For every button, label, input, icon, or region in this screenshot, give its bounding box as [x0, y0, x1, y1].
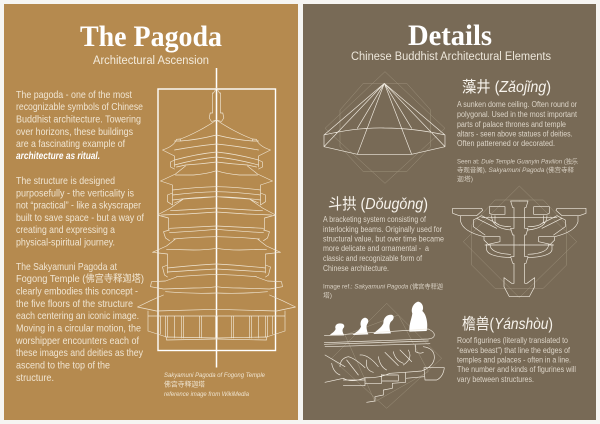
text block: pagoda introduction: architecture as ritual. [16, 151, 100, 162]
text block: Sakyamuni Pagoda [15, 262, 144, 384]
text block: purposeful design: physical-spiritual journey. [16, 238, 115, 248]
title: Details: Details [408, 19, 492, 52]
icon: roof figurines [329, 302, 427, 336]
text block: Dougong description [323, 215, 445, 273]
text block: Dougong description: structural value, but over time became [323, 234, 445, 244]
text block: pagoda introduction: recognizable symbols of Chinese [16, 102, 143, 113]
text block: Dougong description: A bracketing system consisting of [323, 215, 427, 224]
text block: Sakyamuni Pagoda: these images and deities as they [16, 348, 144, 359]
caption: pagoda image reference: 佛宫寺释迦塔 [164, 380, 205, 388]
note: Zaojing locations: 迦塔) [457, 174, 473, 183]
text block: Sakyamuni Pagoda: Moving in a circular motion, the [16, 324, 141, 334]
caption: pagoda image reference: reference image from WikiMedia [164, 391, 249, 398]
text block: Yanshou description: “eaves beast”) that line the edges of [457, 346, 571, 355]
text block: Zaojing description: polygonal. Used in the most important [457, 110, 578, 119]
text block: Sakyamuni Pagoda: ascend to the top of the [16, 360, 110, 372]
text block: Sakyamuni Pagoda: the five floors of the structure [16, 299, 133, 310]
note: Dougong image reference: Image ref.: Sakyamuni Pagoda (佛宫寺释迦 [323, 282, 444, 290]
note: Zaojing locations: 寺观音阁), Sakyamuni Pagoda (佛宫寺释 [457, 165, 575, 174]
text block: pagoda introduction: over horizons, these buildings [16, 127, 133, 138]
text block: purposeful design: The structure is designed [16, 176, 115, 187]
caption: pagoda image reference: Sakyamuni Pagoda of Fogong Temple [164, 372, 265, 379]
note: Zaojing locations [457, 156, 579, 183]
text block: Sakyamuni Pagoda: Fogong Temple (佛宫寺释迦塔) [16, 272, 144, 285]
text block: Zaojing description [457, 100, 578, 148]
text block: purposeful design: not “practical” - like a skyscraper [16, 200, 141, 212]
illustration: zaojing dome ceiling [324, 72, 445, 183]
heading: Yanshou: 檐兽(Yánshòu) [462, 315, 553, 333]
text block: Yanshou description [457, 336, 576, 384]
text block: Sakyamuni Pagoda: each centering an iconic image. [16, 311, 139, 322]
note: Zaojing locations: Seen at: Dule Temple Guanyin Pavilion (独乐 [457, 156, 579, 166]
text block: Yanshou description: Roof figurines (literally translated to [457, 336, 569, 345]
subtitle: Architectural Ascension: Architectural Ascension [93, 55, 209, 67]
text block: Yanshou description: vary between structures. [457, 375, 534, 384]
text block: Zaojing description: A sunken dome ceiling. Often round or [457, 100, 577, 109]
text block: Yanshou description: The number and kinds of figurines will [457, 365, 576, 374]
heading: Zaojing: 藻井 (Zǎojǐng) [462, 78, 551, 96]
text block: Sakyamuni Pagoda: worshipper encounters each of [15, 336, 139, 347]
note: Dougong image reference: 塔) [323, 290, 332, 300]
text block: pagoda introduction [16, 90, 143, 162]
illustration: pagoda elevation [138, 68, 296, 368]
text block: Yanshou description: temples and palaces - often in a line. [457, 356, 571, 364]
text block: Dougong description: interlocking beams. Originally used for [323, 225, 442, 234]
subtitle: Chinese Buddhist Architectural Elements: Chinese Buddhist Architectural Elements [351, 51, 551, 63]
note: Dougong image reference [323, 282, 444, 300]
text block: Zaojing description: parts of palace thrones and temple [457, 120, 567, 129]
caption: pagoda image reference [164, 372, 265, 398]
text block: pagoda introduction: The pagoda - one of the most [16, 90, 132, 101]
text block: Dougong description: classic and recognizable form of [323, 254, 423, 263]
heading: Dougong: 斗拱 (Dǒugǒng) [328, 195, 428, 213]
text block: Sakyamuni Pagoda: clearly embodies this concept - [16, 286, 138, 298]
text block: purposeful design: purposefully - the verticality is [16, 188, 134, 200]
text block: purposeful design: built to save space - but a way of [16, 213, 144, 224]
panel: the pagoda [4, 4, 298, 420]
title: The Pagoda: The Pagoda [80, 20, 222, 53]
text block: Zaojing description: Often patterened or decorated. [457, 139, 555, 148]
text block: Dougong description: Chinese architecture. [323, 264, 389, 273]
text block: Sakyamuni Pagoda: The Sakyamuni Pagoda at [16, 262, 117, 273]
text block: purposeful design [16, 176, 144, 248]
illustration: dougong bracket [453, 186, 586, 298]
text block: purposeful design: creating and expressing a [16, 225, 115, 236]
text block: pagoda introduction: Buddhist architecture. Towering [16, 114, 141, 126]
text block: Dougong description: more delicate and ornamental - a [323, 244, 430, 253]
illustration: yanshou roof figurines [324, 302, 444, 408]
text block: pagoda introduction: are a fascinating example of [16, 139, 125, 150]
text block: Zaojing description: altars - seen above statues of deities. [457, 130, 572, 138]
panel: details [303, 4, 596, 420]
text block: Sakyamuni Pagoda: structure. [16, 373, 54, 384]
